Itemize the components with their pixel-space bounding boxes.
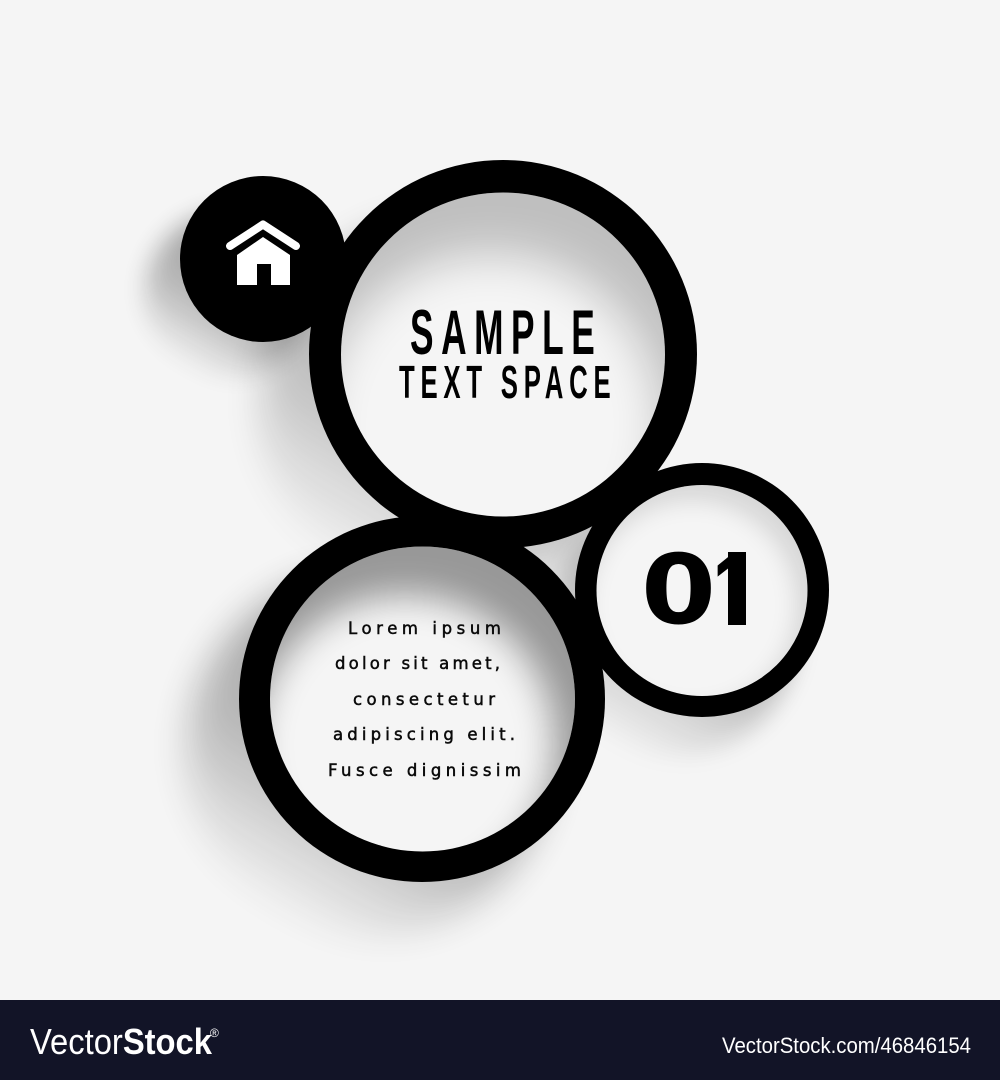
registered mark: ® xyxy=(210,1026,219,1040)
panel: big circle xyxy=(309,160,697,547)
body text xyxy=(328,619,521,780)
body text: Fusce dignissim xyxy=(328,761,521,780)
long shadows behind circles xyxy=(145,213,797,937)
icon: house xyxy=(230,224,296,285)
badge circle xyxy=(180,176,346,342)
footer bar xyxy=(0,1000,1000,1080)
subheading: text space: TEXT SPACE xyxy=(399,356,611,408)
body text: dolor sit amet, xyxy=(335,654,500,673)
inner face: big circle xyxy=(341,192,665,516)
body text: consectetur xyxy=(353,690,495,709)
inner face: lower circle xyxy=(270,546,575,852)
body text: Lorem ipsum xyxy=(348,619,501,638)
panel: home badge xyxy=(180,176,346,342)
ring: lower circle xyxy=(239,516,605,882)
panel: lower circle xyxy=(239,518,605,882)
footer logo: VectorStock xyxy=(30,1021,213,1062)
body text: adipiscing elit. xyxy=(333,725,515,744)
inner face: right circle xyxy=(596,485,808,696)
panel: right number circle xyxy=(570,460,830,720)
inner shadow: lower circle xyxy=(270,546,575,832)
number 01: 1 xyxy=(712,532,758,647)
heading: sample: SAMPLE xyxy=(410,297,595,368)
inner shadow: big circle xyxy=(341,192,665,447)
ring: right circle xyxy=(575,463,829,717)
number 01 xyxy=(646,552,746,625)
number 01: 0 xyxy=(641,534,716,646)
footer url: VectorStock.com/46846154 xyxy=(722,1033,971,1058)
inner shadow: right circle xyxy=(597,485,808,683)
ring: big circle xyxy=(309,160,697,548)
